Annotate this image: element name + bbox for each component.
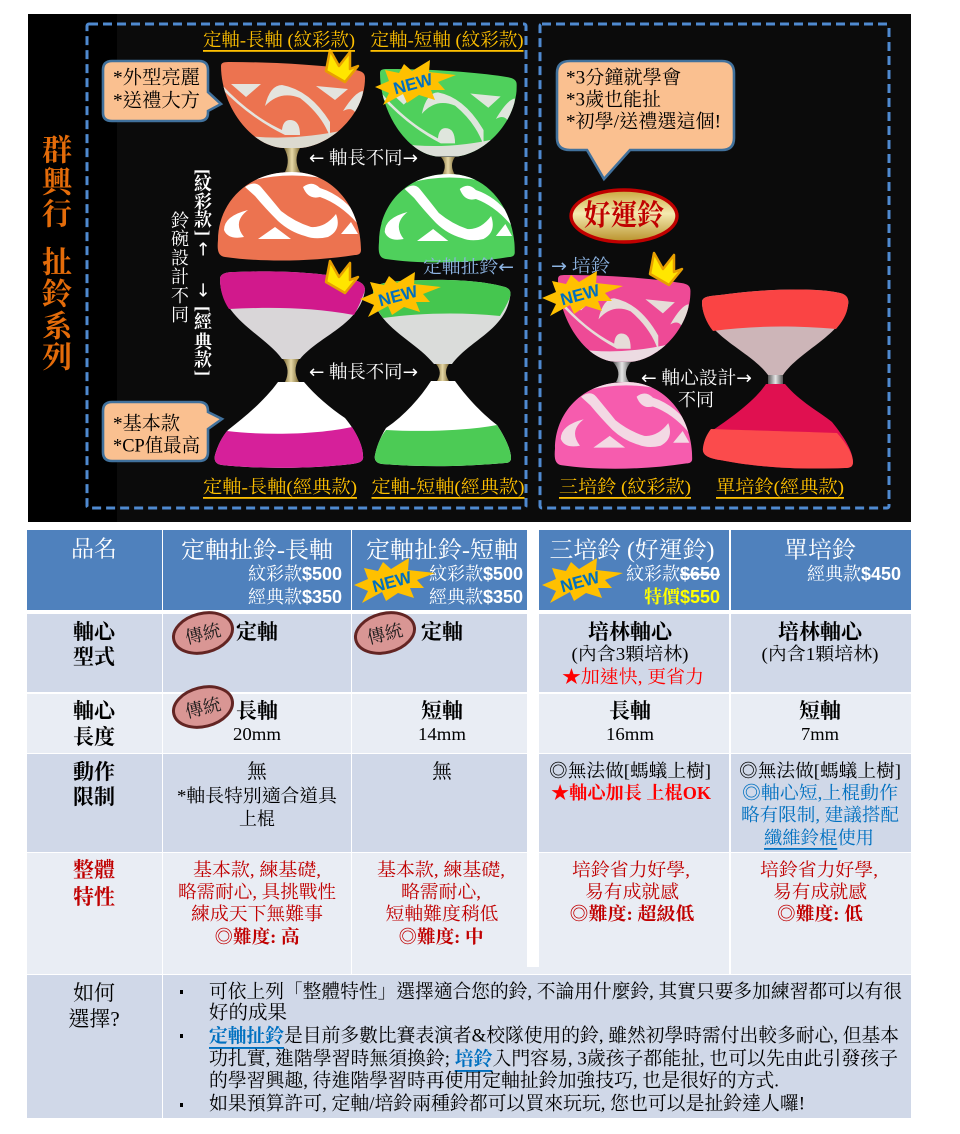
NEW badge: table short axle [354,558,435,603]
axle type cells: 定軸 [421,620,463,644]
axle type cells: 定軸 [236,620,278,644]
row heading: how to choose: 選擇? [68,1007,120,1031]
crown icon: classic long axle [326,261,358,293]
NEW badge: green pattern [375,60,456,105]
axle length cells: 7mm [801,724,839,744]
product labels: 定軸-短軸(經典款) [372,477,525,498]
callout: easy to learn: *3分鐘就學會 [566,66,681,88]
diabolo: magenta classic long axle [215,271,365,468]
move limit cells: ◎軸心短,上棍動作 [742,783,898,803]
axle type cells [236,620,878,687]
vertical annotation: bowl design differs: 款 [194,349,212,370]
product labels [203,30,844,498]
annotation: axle design differs: ← 軸心設計→ [641,368,752,388]
vertical title: 群 [42,134,72,168]
product labels: 單培鈴(經典款) [716,477,844,498]
product labels: 定軸-短軸 (紋彩款) [370,30,524,51]
axle type cells: 培林軸心 [588,620,675,644]
move limit cells: ★軸心加長 上棍OK [551,783,711,803]
how to choose text: 好的成果 [209,1002,287,1024]
vertical annotation: bowl design differs: 碗 [171,229,189,249]
annotation: fixed axle diabolo: 定軸扯鈴← [423,256,514,278]
diabolo: pink pattern triple bearing [554,275,692,469]
move limit cells: ◎無法做[螞蟻上樹] [549,761,711,781]
row heading: how to choose: 如何 [73,981,115,1005]
stamp: traditional, long axle type [169,607,237,659]
vertical title: 興 [42,166,76,200]
row heading: axle length [73,699,118,749]
overall trait cells: ◎難度: 低 [777,903,863,924]
how to choose text: 如果預算許可, 定軸/培鈴兩種鈴都可以買來玩玩, 您也可以是扯鈴達人囉! [209,1092,805,1114]
overall trait cells: ◎難度: 超級低 [570,903,694,924]
axle type cells: (內含1顆培林) [762,644,878,665]
how to choose text: 可依上列「整體特性」選擇適合您的鈴, 不論用什麼鈴, 其實只要多加練習都可以有很 [209,980,902,1002]
axle length cells: 短軸 [799,699,841,723]
move limit cells [177,760,901,848]
stamp: traditional, long axle length: 傳統 [183,694,224,722]
callout: easy to learn: *初學/送禮選這個! [566,110,721,132]
vertical annotation: bowl design differs: ↑ [195,240,211,260]
axle length cells: 短軸 [421,699,463,723]
header: triple bearing with prices: 特價$550 [644,586,720,607]
header: single bearing with price: 經典款$450 [807,564,901,584]
badge: lucky diabolo: 好運鈴 [584,199,664,232]
overall trait cells [178,860,878,947]
overall trait cells: 短軸難度稍低 [386,904,498,924]
callout: basic model [103,402,222,461]
how to choose text: 功扎實, 進階學習時無須換鈴; 培鈴入門容易, 3歲孩子都能扯, 也可以先由此引發孩子 [209,1046,898,1070]
move limit cells: 略有限制, 建議搭配 [741,805,899,825]
diabolo: green classic short axle [373,280,511,466]
stamp: traditional, long axle length [169,681,237,733]
axle length cells: 14mm [418,724,466,744]
vertical annotation: bowl design differs: ] [193,370,213,376]
row heading: axle type [73,620,118,669]
move limit cells: 無 [247,760,267,783]
callout: easy to learn [557,61,734,179]
header: fixed long axle with prices: 經典款$350 [248,587,342,607]
row heading: move limits: 動作 [73,760,115,784]
axle type cells: 培林軸心 [778,620,865,644]
axle length cells [233,699,841,744]
vertical annotation: bowl design differs: 彩 [194,192,212,212]
overall trait cells: 培鈴省力好學, [572,860,690,880]
header: triple bearing with prices [550,538,720,607]
header: fixed short axle with prices: 紋彩款$500 [429,564,523,584]
vertical annotation: bowl design differs: 典 [194,332,215,352]
axle length cells: 20mm [233,724,281,744]
dashed frame: bearing group [540,24,889,508]
axle type cells: ★加速快, 更省力 [562,667,704,687]
overall trait cells: 略需耐心, [401,882,481,902]
vertical title [42,134,76,374]
axle length cells: 長軸 [236,699,278,723]
move limit cells: 纖維鈴棍使用 [764,828,874,848]
overall trait cells: ◎難度: 中 [398,926,484,947]
crown icon: triple bearing [650,253,682,285]
vertical annotation: bowl design differs: ] [193,230,213,236]
NEW badge: green pattern: NEW [391,69,436,98]
header: triple bearing with prices: 三培鈴 (好運鈴) [550,538,714,562]
callout: basic model: *基本款 [113,412,180,434]
axle length cells: 長軸 [609,699,651,723]
annotation: axle design differs: 不同 [678,390,714,410]
header: fixed long axle with prices: 紋彩款$500 [248,564,342,584]
callout: looks and gift: *送禮大方 [113,90,200,112]
how to choose text [180,980,902,1114]
overall trait cells: 基本款, 練基礎, [377,860,505,880]
header: single bearing with price [784,538,901,584]
row heading: axle length: 軸心 [73,699,118,723]
stamp: traditional, long axle type: 傳統 [183,620,224,648]
overall trait cells: 易有成就感 [585,882,679,902]
move limit cells: 無 [432,760,452,783]
header: fixed short axle with prices [366,538,523,607]
product labels: 定軸-長軸(經典款) [203,477,357,498]
callout: looks and gift: *外型亮麗 [113,66,200,88]
vertical annotation: bowl design differs: [ [193,169,213,175]
badge: lucky diabolo [571,190,677,242]
move limit cells: 上棍 [239,809,275,829]
row heading: overall traits: 特性 [73,885,115,909]
move limit cells: *軸長特別適合道具 [177,786,338,806]
axle type cells: (內含3顆培林) [572,644,688,665]
row heading: move limits: 限制 [73,785,115,809]
NEW badge: pink pattern [542,271,623,316]
row heading: how to choose [68,981,120,1031]
vertical annotation: bowl design differs: 款 [194,209,212,230]
annotation: axle length differs, patterned: ← 軸長不同→ [309,148,418,168]
callout: basic model: *CP值最高 [113,434,200,456]
header: triple bearing with prices: 紋彩款$650 [626,564,720,584]
header: fixed short axle with prices: 定軸扯鈴-短軸 [366,538,518,562]
photo panel background [28,14,911,522]
diabolo: orange pattern long axle [218,62,365,260]
row heading: overall traits [73,858,115,909]
header: fixed long axle with prices [181,538,342,607]
vertical annotation: bowl design differs: [ [193,306,213,312]
NEW badge: table triple bearing [542,558,623,603]
vertical title: 行 [42,198,72,232]
dashed frame: fixed axle group [87,24,526,508]
header: single bearing with price: 單培鈴 [784,538,856,562]
vertical annotation: bowl design differs: 紋 [194,173,212,194]
vertical annotation: bowl design differs: ↓ [195,280,211,302]
NEW badge: green classic: NEW [376,281,421,310]
NEW badge: pink pattern: NEW [558,280,603,309]
overall trait cells: 培鈴省力好學, [760,860,878,880]
vertical annotation: bowl design differs: 計 [171,267,189,287]
row heading: move limits [73,760,115,809]
vertical title: 扯 [42,246,72,280]
NEW badge: table triple bearing: NEW [558,567,603,596]
header: fixed long axle with prices: 定軸扯鈴-長軸 [181,538,333,562]
header: name: 品名 [71,536,117,562]
stamp: traditional, short axle type: 傳統 [365,620,406,648]
row heading: axle type: 軸心 [73,620,118,644]
move limit cells: ◎無法做[螞蟻上樹] [739,761,901,781]
vertical annotation: bowl design differs: 經 [194,312,212,332]
vertical annotation: bowl design differs: 鈴 [171,211,189,231]
overall trait cells: 練成天下無難事 [191,904,323,924]
diabolo: red classic single bearing [702,289,853,469]
row heading: axle type: 型式 [73,645,115,669]
callout: easy to learn: *3歲也能扯 [566,88,661,110]
annotation: axle design differs [641,368,752,410]
vertical title: 鈴 [42,278,72,312]
axle length cells: 16mm [606,724,654,744]
product labels: 定軸-長軸 (紋彩款) [203,30,355,51]
diabolo: green pattern short axle [378,69,517,262]
header: fixed short axle with prices: 經典款$350 [429,587,523,607]
product labels: 三培鈴 (紋彩款) [559,477,691,498]
NEW badge: table short axle: NEW [370,567,415,596]
callout: looks and gift [103,61,221,121]
annotation: axle length differs, classic: ← 軸長不同→ [309,362,418,382]
vertical annotation: bowl design differs: 設 [171,248,189,268]
vertical title: 系 [42,310,73,344]
how to choose text: 的學習興趣, 待進階學習時再使用定軸扯鈴加強技巧, 也是很好的方式. [209,1070,779,1092]
annotation: bearing diabolo: → 培鈴 [551,256,610,276]
overall trait cells: 略需耐心, 具挑戰性 [178,882,336,902]
comparison table background [27,530,911,1118]
overall trait cells: ◎難度: 高 [214,926,300,947]
overall trait cells: 基本款, 練基礎, [193,860,321,880]
NEW badge: green classic [360,272,441,317]
vertical annotation: bowl design differs: 同 [171,305,189,325]
overall trait cells: 易有成就感 [773,882,867,902]
row heading: overall traits: 整體 [73,858,115,882]
stamp: traditional, short axle type [351,607,419,659]
vertical annotation: bowl design differs [171,169,215,376]
vertical title: 列 [42,342,72,374]
row heading: axle length: 長度 [73,725,115,749]
vertical annotation: bowl design differs: 不 [171,286,189,306]
crown icon: patterned long axle [326,50,358,82]
how to choose text: 定軸扯鈴是目前多數比賽表演者&校隊使用的鈴, 雖然初學時需付出較多耐心, 但基本 [209,1024,899,1046]
